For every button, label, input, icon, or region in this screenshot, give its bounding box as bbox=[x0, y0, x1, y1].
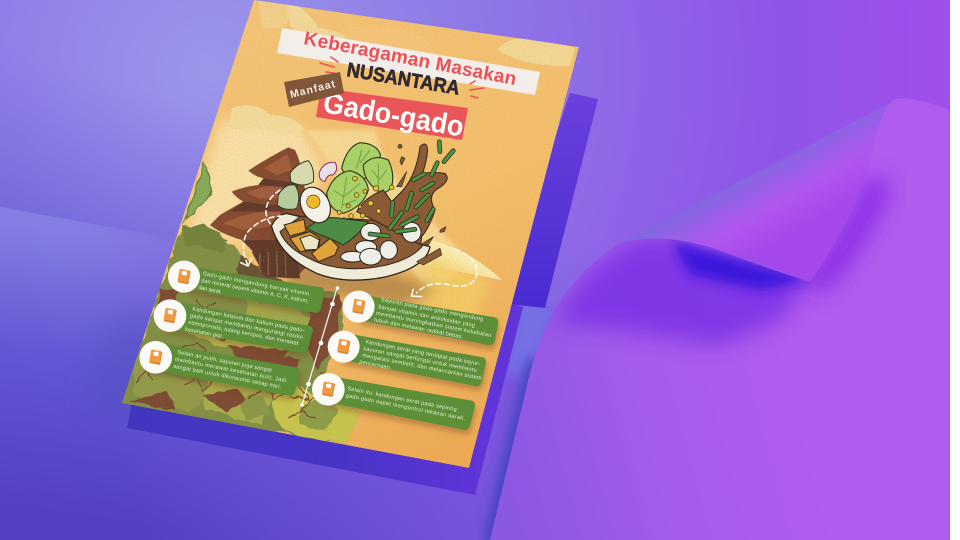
text bbox=[173, 350, 286, 391]
card 6 bbox=[312, 373, 475, 430]
arrow: left dashed bbox=[241, 190, 283, 266]
icon: recipe book bbox=[328, 331, 360, 363]
card 2 bbox=[154, 299, 313, 353]
plate shadow bbox=[270, 232, 438, 304]
title: Keberagaman Masakan: Keberagaman Masakan bbox=[302, 28, 518, 90]
title: paper band bbox=[277, 28, 540, 95]
text: gado gado dapat mengontrol tekanan darah. bbox=[345, 393, 466, 422]
tofu bbox=[284, 219, 338, 262]
text: gado sangat membantu mengurangi resiko bbox=[189, 313, 303, 341]
arrow: right dashed bbox=[411, 249, 477, 297]
icon: recipe book bbox=[154, 299, 186, 332]
poster shadow bbox=[127, 93, 598, 495]
text: tubuh dan melawan radikal bebas. bbox=[373, 317, 464, 341]
label: Manfaat bbox=[284, 72, 344, 107]
foliage bbox=[118, 163, 360, 444]
card 1 bbox=[168, 261, 324, 313]
main sheet bbox=[490, 98, 950, 540]
card 3 bbox=[139, 341, 300, 396]
green beans bbox=[370, 142, 453, 236]
corn dots bbox=[334, 176, 394, 229]
curl shadow bbox=[555, 235, 810, 345]
greens bbox=[307, 218, 368, 245]
text bbox=[184, 306, 305, 347]
fold shadow bbox=[815, 180, 880, 285]
text: osteoporosis, tulang keropos, dan merawat bbox=[188, 320, 299, 347]
text: dan mineral seperti vitamin A, C, K, kalium, bbox=[201, 278, 310, 305]
text: membantu meningkatkan sistem kekebalan bbox=[375, 311, 492, 339]
text: dan serat. bbox=[198, 285, 223, 296]
background: lower sheet bbox=[0, 207, 560, 540]
text bbox=[373, 297, 492, 341]
sauce bbox=[280, 217, 423, 269]
text: banyak vitamin dan antioksidan yang bbox=[378, 304, 475, 329]
text: kesehatan gigi. bbox=[184, 327, 224, 340]
text: mengatasi sembelit, dan melancarkan sistem bbox=[362, 353, 482, 382]
title: NUSANTARA: NUSANTARA bbox=[345, 59, 461, 100]
text: sayuran sangat berfungsi untuk membantu bbox=[363, 346, 477, 374]
lontong white pieces bbox=[341, 222, 421, 265]
text bbox=[359, 339, 482, 382]
right white margin bbox=[950, 0, 960, 540]
flap underside bbox=[620, 103, 890, 282]
text: Selain itu, kandungan serat pada sepiring bbox=[347, 386, 457, 413]
foliage base bbox=[118, 163, 360, 444]
text: Kandungan serat yang terdapat pada sayur- bbox=[365, 339, 481, 368]
icon: recipe book bbox=[139, 341, 172, 374]
curled paper sheet bbox=[490, 98, 950, 540]
poster bbox=[118, 0, 580, 470]
sauce splash bbox=[357, 144, 447, 245]
heading: Gado-gado red banner: Gado-gado bbox=[321, 87, 466, 144]
text: sangat baik untuk dikonsumsi setiap hari. bbox=[173, 364, 282, 391]
temple bbox=[210, 147, 313, 278]
plate bbox=[272, 213, 430, 280]
text: Sayuran pada gado-gado mengandung bbox=[380, 297, 484, 323]
egg bbox=[294, 182, 336, 228]
lettuce bbox=[327, 143, 393, 213]
paper grain bbox=[120, 0, 580, 470]
card 4 bbox=[343, 291, 498, 345]
icon: recipe book bbox=[168, 261, 200, 293]
text: Kandungan kalsium dan kalium pada gado- bbox=[192, 306, 305, 334]
text: Gado-gado mengandung banyak vitamin bbox=[202, 271, 310, 298]
label: Manfaat: Manfaat bbox=[289, 78, 337, 101]
clouds and pale sky bbox=[185, 0, 575, 330]
spark marks bbox=[320, 57, 484, 98]
illustration: gado-gado plate bbox=[272, 142, 453, 280]
icon: recipe book bbox=[312, 373, 345, 406]
poster base bbox=[122, 0, 579, 468]
icon: recipe book bbox=[343, 291, 375, 323]
text: membantu merawat kesehatan kulit. Jadi bbox=[174, 357, 286, 384]
light leaf patches bbox=[186, 332, 285, 350]
text: pencernaan. bbox=[359, 359, 392, 372]
timeline line bbox=[300, 286, 339, 407]
leaf outlines bbox=[135, 300, 339, 420]
text: Selain air putih, sayuran juga sangat bbox=[177, 350, 273, 374]
crackers bbox=[277, 161, 337, 209]
card 5 bbox=[328, 331, 486, 386]
brown shadows in foliage bbox=[128, 290, 340, 413]
